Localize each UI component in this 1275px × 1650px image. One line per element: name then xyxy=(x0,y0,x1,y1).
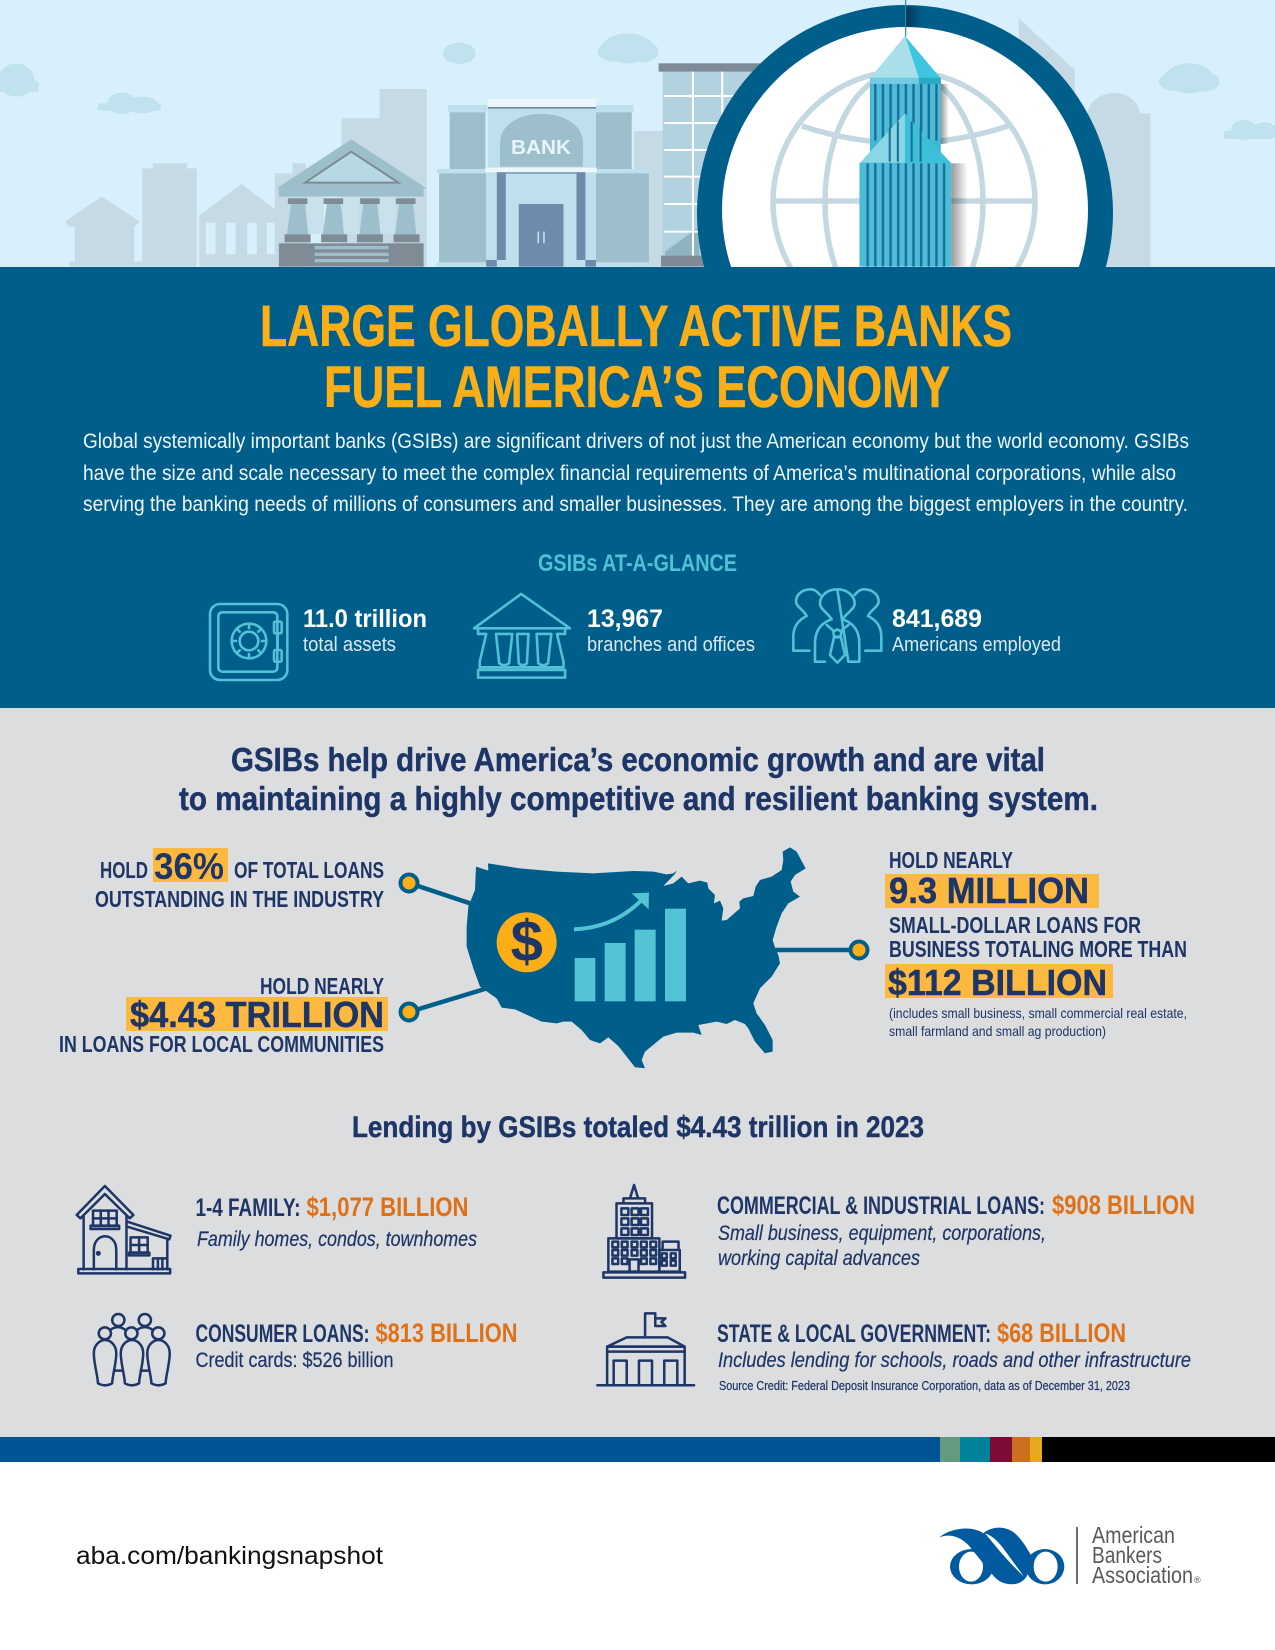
callout: small-dollar loans: small farmland and small ag production) xyxy=(889,1023,1106,1039)
callout: 4.43 trillion: HOLD NEARLY xyxy=(260,973,384,999)
connector lines xyxy=(409,883,859,1012)
BANK sign: BANK xyxy=(511,137,572,159)
clouds xyxy=(0,33,1275,140)
loan: state and local government: Includes lending for schools, roads and other infrastructure xyxy=(718,1349,1191,1372)
stat: branches: 13,967 xyxy=(587,605,663,633)
temple bank xyxy=(276,139,427,267)
office building xyxy=(659,63,764,267)
logo wordmark: American xyxy=(1092,1522,1175,1548)
background silhouettes xyxy=(65,18,1151,267)
callout: 4.43 trillion: IN LOANS FOR LOCAL COMMUNITIES xyxy=(59,1031,384,1057)
bars xyxy=(575,893,686,1001)
loan: 1-4 family: $1,077 BILLION xyxy=(306,1192,468,1222)
intro paragraph: have the size and scale necessary to meet the complex financial requirements of America’s multinational corporations, while also xyxy=(83,461,1176,485)
dollar sign: $ xyxy=(511,909,543,974)
icon: safe xyxy=(210,604,287,680)
logo wordmark: ® xyxy=(1194,1575,1201,1585)
callout: 36 percent: OUTSTANDING IN THE INDUSTRY xyxy=(95,886,384,912)
background: sky xyxy=(0,0,1275,267)
globe emblem: dark ring with white disc xyxy=(697,5,1113,421)
source credit: Source Credit: Federal Deposit Insurance Corporation, data as of December 31, 2023 xyxy=(719,1379,1130,1393)
callout: small-dollar loans: SMALL-DOLLAR LOANS FOR xyxy=(889,912,1141,938)
loan: commercial and industrial: working capital advances xyxy=(718,1247,920,1270)
callout: small-dollar loans: 9.3 MILLION xyxy=(889,870,1089,911)
callout: small-dollar loans: (includes small business, small commercial real estate, xyxy=(889,1005,1187,1021)
loan: commercial and industrial: Small business, equipment, corporations, xyxy=(718,1222,1046,1245)
stat: total assets: 11.0 trillion xyxy=(303,605,427,633)
globe lines xyxy=(773,71,1035,333)
heading: lending: Lending by GSIBs totaled $4.43 trillion in 2023 xyxy=(352,1111,924,1144)
stat: employed xyxy=(892,605,1061,656)
loan: consumer: Credit cards: $526 billion xyxy=(196,1349,394,1372)
logo mark xyxy=(939,1528,1064,1584)
stat: total assets: total assets xyxy=(303,634,396,656)
callout: 4.43 trillion xyxy=(59,973,388,1057)
logo: American Bankers Association xyxy=(939,1522,1201,1588)
title: LARGE GLOBALLY ACTIVE BANKS xyxy=(260,294,1012,359)
logo wordmark: Association xyxy=(1092,1562,1193,1588)
callout: small-dollar loans: $112 BILLION xyxy=(888,962,1107,1003)
logo wordmark: Bankers xyxy=(1092,1542,1162,1568)
icon: government building xyxy=(597,1313,694,1385)
icon: office buildings xyxy=(603,1185,685,1278)
stat: total assets xyxy=(303,605,427,656)
loan: consumer: $813 BILLION xyxy=(376,1318,518,1348)
callout: 36 percent: HOLD xyxy=(100,857,148,883)
intro paragraph xyxy=(83,429,1189,516)
panel: dark blue introduction xyxy=(0,267,1275,708)
icon: house xyxy=(77,1186,171,1273)
title xyxy=(260,294,1012,420)
callout: 4.43 trillion: $4.43 TRILLION xyxy=(130,994,384,1035)
callout: 36 percent: OF TOTAL LOANS xyxy=(234,857,384,883)
heading: growth: to maintaining a highly competitive and resilient banking system. xyxy=(179,780,1098,817)
loan: state and local government: STATE & LOCAL GOVERNMENT: xyxy=(717,1320,991,1348)
loan: commercial and industrial xyxy=(717,1190,1195,1270)
loan: commercial and industrial: COMMERCIAL & INDUSTRIAL LOANS: xyxy=(717,1192,1045,1220)
title: FUEL AMERICA’S ECONOMY xyxy=(324,355,950,420)
logo wordmark xyxy=(1092,1522,1201,1588)
stat: employed: Americans employed xyxy=(892,634,1061,656)
callout: small-dollar loans: BUSINESS TOTALING MORE THAN xyxy=(889,936,1187,962)
loan: consumer: CONSUMER LOANS: xyxy=(196,1320,370,1348)
header illustration: city skyline with bank buildings xyxy=(0,18,1275,267)
BANK building xyxy=(437,99,650,267)
heading: growth xyxy=(179,741,1098,817)
callout: 36 percent xyxy=(95,846,384,912)
stat: employed: 841,689 xyxy=(892,605,982,633)
heading: growth: GSIBs help drive America’s economic growth and are vital xyxy=(231,741,1045,778)
icon: bank xyxy=(474,594,570,678)
loan: 1-4 family: 1-4 FAMILY: xyxy=(196,1194,300,1222)
callout: small-dollar loans xyxy=(885,847,1187,1039)
panel: gray growth and lending xyxy=(0,708,1275,1437)
callout: small-dollar loans: HOLD NEARLY xyxy=(889,847,1013,873)
loan: state and local government: $68 BILLION xyxy=(997,1318,1126,1348)
dollar coin xyxy=(497,912,557,972)
stat: branches: branches and offices xyxy=(587,634,755,656)
icon: group of people xyxy=(94,1314,170,1385)
loan: commercial and industrial: $908 BILLION xyxy=(1052,1190,1195,1220)
heading: at a glance: GSIBs AT-A-GLANCE xyxy=(538,550,737,577)
icon: people with tie xyxy=(793,589,881,663)
map of the United States with chart xyxy=(467,847,806,1068)
skyscraper centrepiece xyxy=(859,0,968,267)
stat: branches xyxy=(587,605,755,656)
callout dots xyxy=(400,874,868,1020)
loan: 1-4 family: Family homes, condos, townhomes xyxy=(197,1228,477,1251)
loan: state and local government xyxy=(717,1318,1191,1372)
colour bar xyxy=(0,1437,1275,1462)
footer url: aba.com/bankingsnapshot xyxy=(76,1542,383,1570)
loan: 1-4 family xyxy=(196,1192,477,1251)
callout: 36 percent: 36% xyxy=(154,846,224,887)
loan: consumer xyxy=(196,1318,518,1372)
